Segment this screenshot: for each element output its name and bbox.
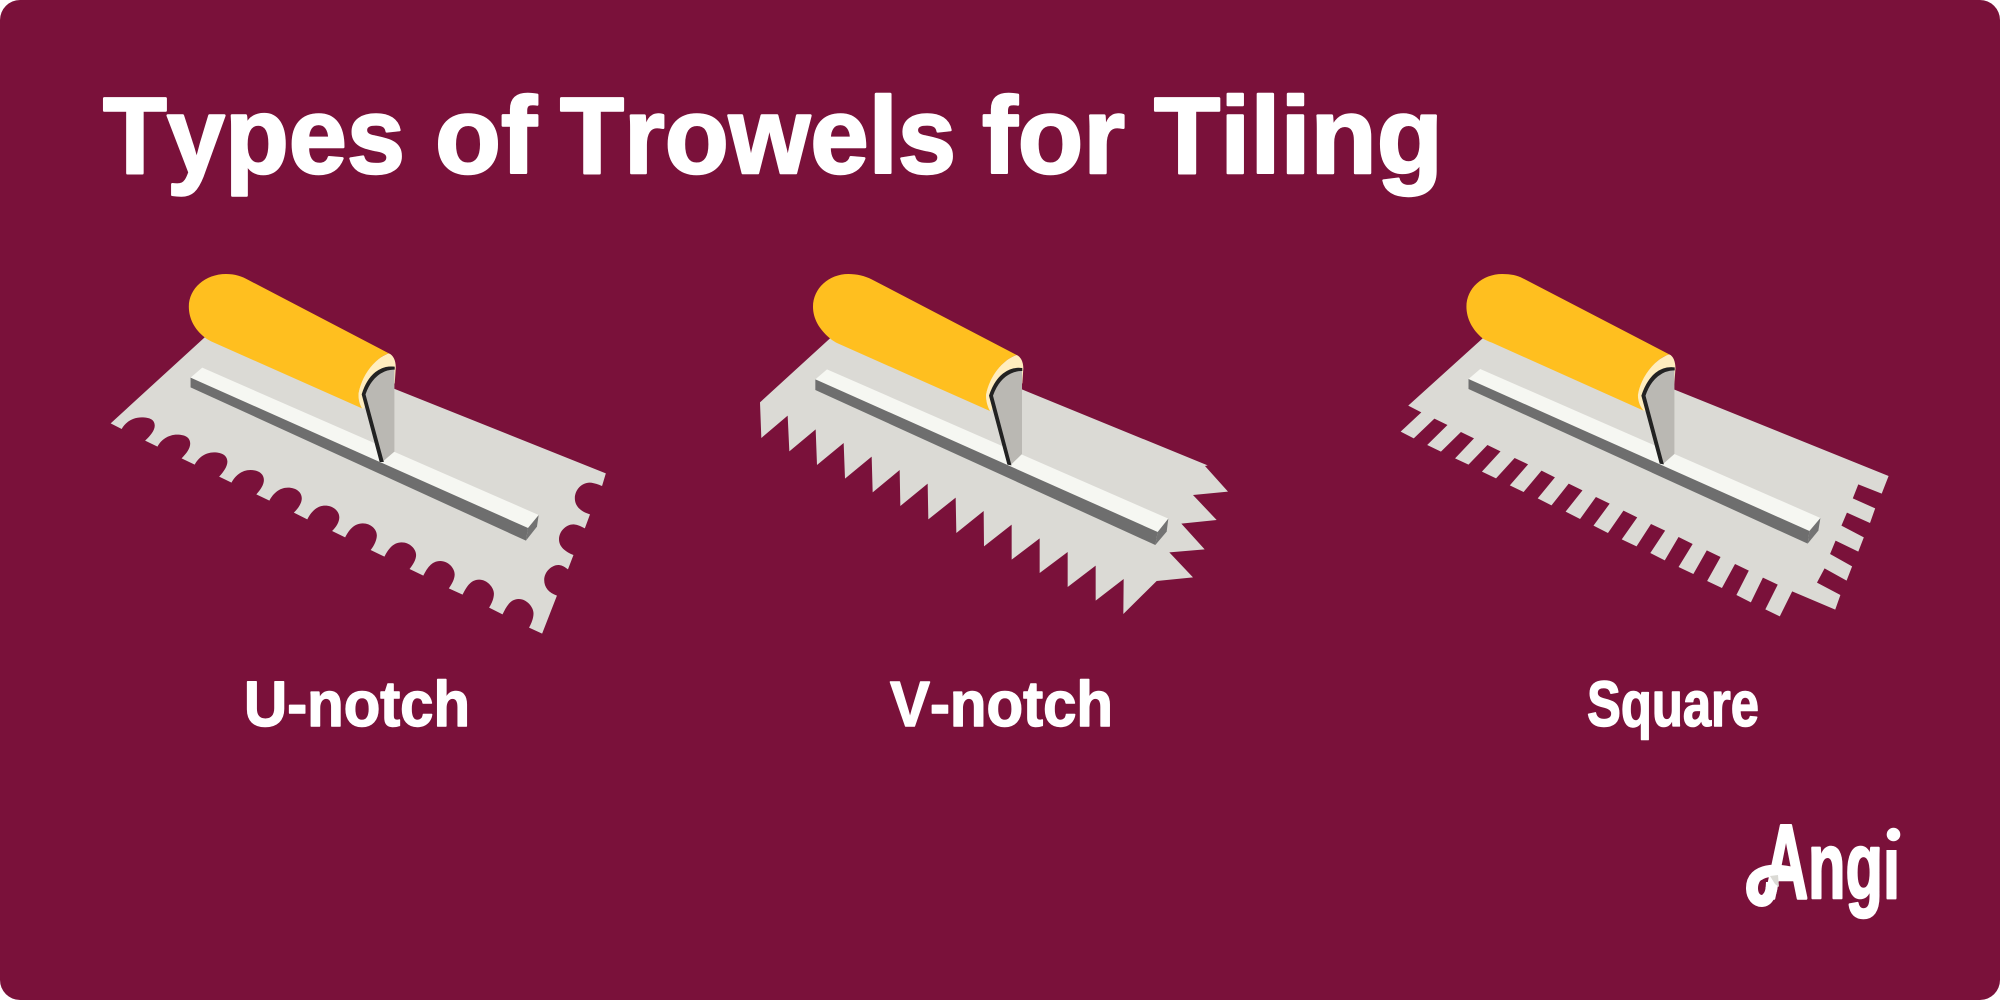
V-notch blade: [760, 338, 1228, 614]
title: of: [435, 75, 538, 197]
U-notch handle: [189, 274, 396, 462]
Square handle: [1466, 274, 1675, 464]
label: V-notch: V-notch: [890, 668, 1113, 740]
title: [103, 75, 1443, 197]
U-notch raised bar: [191, 368, 539, 541]
panel: Square trowel: [1401, 274, 1889, 616]
title: Tiling: [1154, 75, 1443, 197]
logo: Angi: A: [1764, 804, 1808, 921]
V-notch raised bar: [815, 369, 1168, 545]
U-notch blade: [111, 337, 606, 634]
title: Types: [103, 75, 405, 197]
logo: Angi: [1752, 804, 1904, 921]
title: Trowels: [560, 75, 956, 197]
panel: U-notch trowel: [111, 274, 606, 634]
Square blade: [1401, 338, 1889, 616]
panel: V-notch trowel: [760, 274, 1228, 614]
label: Square: Square: [1587, 668, 1759, 740]
title: for: [982, 75, 1125, 197]
V-notch handle: [813, 274, 1023, 465]
Square raised bar: [1468, 369, 1820, 544]
label: U-notch: U-notch: [244, 668, 470, 740]
logo: Angi: ngi: [1808, 813, 1900, 919]
